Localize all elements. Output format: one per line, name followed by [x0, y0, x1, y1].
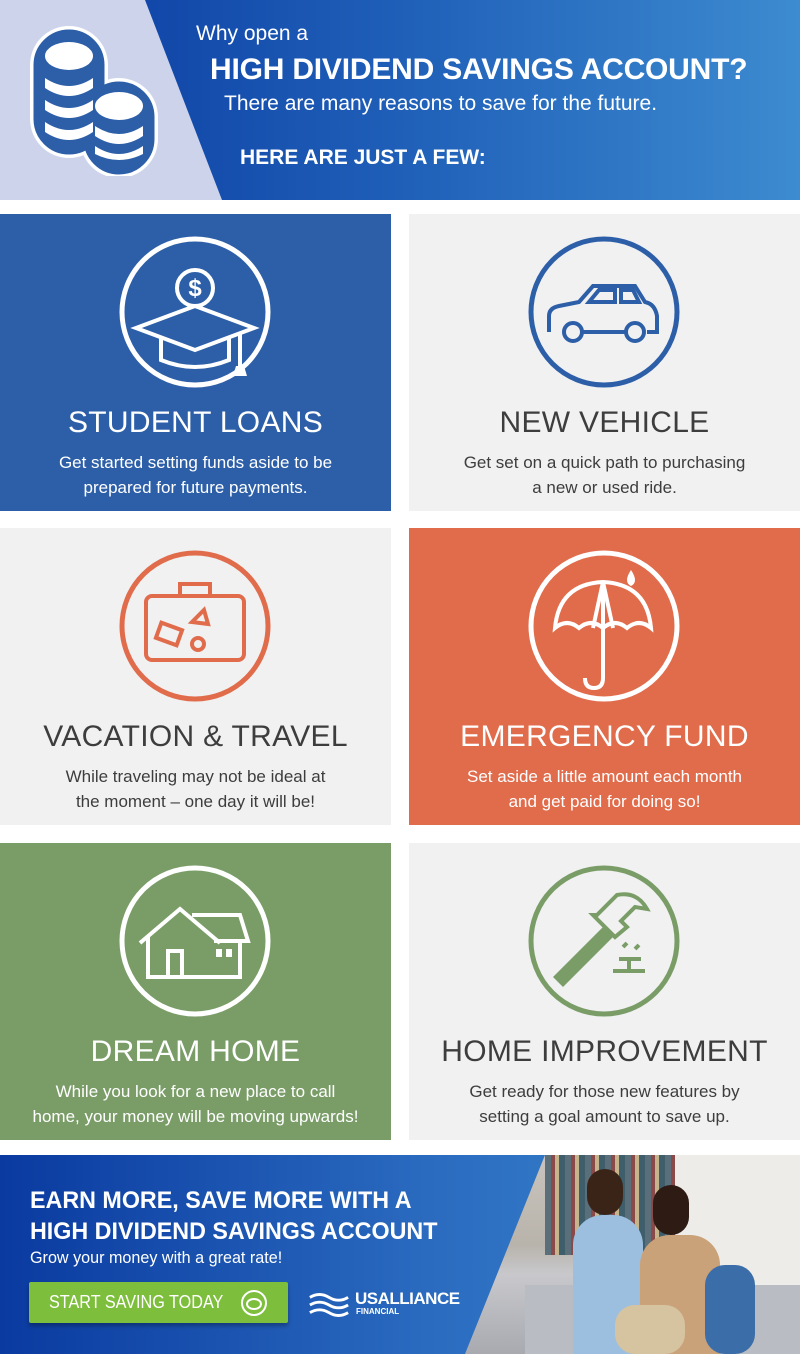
panel: dream home: home, your money will be moving upwards!	[32, 1107, 358, 1126]
panel: vacation: VACATION & TRAVEL	[43, 720, 348, 753]
panel: emergency fund: EMERGENCY FUND	[460, 720, 749, 753]
icon: graduation cap	[120, 236, 270, 388]
panel: student loans: STUDENT LOANS	[68, 406, 323, 439]
button: start saving today	[29, 1282, 288, 1323]
panel: new vehicle	[409, 214, 800, 511]
panel: home improvement: HOME IMPROVEMENT	[441, 1035, 768, 1068]
icon: coins	[30, 26, 158, 176]
icon: suitcase	[120, 550, 270, 702]
panel: home improvement: setting a goal amount to save up.	[479, 1107, 730, 1126]
panel: home improvement	[409, 843, 800, 1140]
panel: home improvement: Get ready for those new features by	[469, 1082, 740, 1101]
header	[0, 0, 800, 200]
icon: hammer	[528, 866, 680, 1016]
panel: vacation: While traveling may not be ideal at	[66, 767, 325, 786]
icon: graduation cap: $	[188, 275, 202, 302]
footer banner	[0, 1155, 800, 1354]
panel: emergency fund	[409, 528, 800, 825]
panel: dream home	[0, 843, 391, 1140]
panel: vacation: the moment – one day it will be!	[76, 792, 315, 811]
panel: student loans: prepared for future payments.	[84, 478, 307, 497]
panel: student loans: Get started setting funds aside to be	[59, 453, 332, 472]
logo: usalliance: USALLIANCE	[355, 1289, 460, 1308]
header: HERE ARE JUST A FEW:	[240, 146, 486, 169]
logo: usalliance: FINANCIAL	[356, 1307, 399, 1316]
footer heading: EARN MORE, SAVE MORE WITH A	[30, 1187, 412, 1214]
header: HIGH DIVIDEND SAVINGS ACCOUNT?	[210, 53, 747, 86]
panel: emergency fund: Set aside a little amount each month	[467, 767, 742, 786]
panel: new vehicle: NEW VEHICLE	[499, 406, 710, 439]
panel: emergency fund: and get paid for doing so!	[509, 792, 700, 811]
footer heading	[30, 1187, 438, 1245]
footer heading: HIGH DIVIDEND SAVINGS ACCOUNT	[30, 1218, 437, 1245]
icon: house	[120, 866, 270, 1016]
panel: new vehicle: Get set on a quick path to purchasing	[464, 453, 745, 472]
header: There are many reasons to save for the future.	[224, 92, 657, 115]
photo of couple (approximation)	[465, 1155, 800, 1354]
header left light panel	[0, 0, 222, 200]
header text: Why open a	[196, 22, 308, 45]
panel: dream home: DREAM HOME	[91, 1035, 300, 1068]
logo: usalliance	[309, 1289, 460, 1317]
panel: vacation	[0, 528, 391, 825]
footer subtext: Grow your money with a great rate!	[30, 1248, 282, 1267]
button: start saving today: START SAVING TODAY	[49, 1292, 223, 1312]
icon: car	[528, 236, 680, 388]
panel: new vehicle: a new or used ride.	[532, 478, 677, 497]
panel: student loans	[0, 214, 391, 511]
icon: piggy	[241, 1290, 267, 1316]
icon: umbrella	[528, 550, 680, 702]
panel: dream home: While you look for a new place to call	[56, 1082, 335, 1101]
